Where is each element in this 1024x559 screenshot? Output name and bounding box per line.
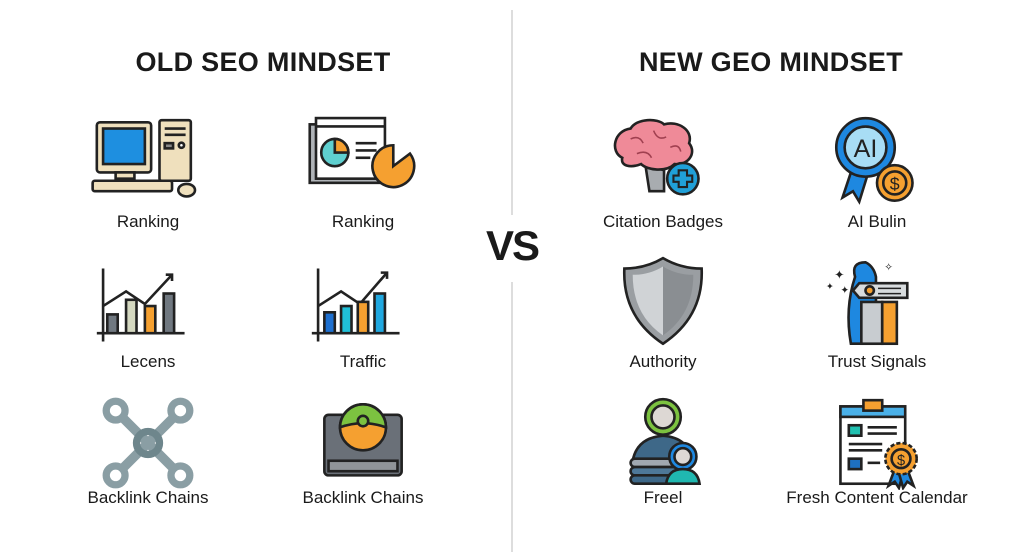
- icon: calendar: $: [897, 453, 905, 469]
- icon: AI badge: AI: [854, 135, 877, 163]
- icon: brain: [614, 118, 700, 196]
- icon: trust signals: [826, 261, 909, 346]
- vs: VS: [486, 222, 538, 269]
- icon: trust signals: ✦: [840, 286, 849, 297]
- icon: trust signals: ✧: [884, 263, 893, 274]
- icon: calendar: [839, 398, 918, 490]
- divider: [511, 10, 513, 215]
- icon: report pie: [308, 116, 416, 188]
- label: Lecens: [121, 352, 175, 371]
- label: Fresh Content Calendar: [786, 488, 968, 507]
- label: Traffic: [340, 352, 386, 371]
- icon: trust signals: ✦: [834, 268, 845, 282]
- title: new geo: NEW GEO MINDSET: [639, 47, 903, 77]
- icon: chain: [102, 398, 194, 488]
- title: old seo: OLD SEO MINDSET: [135, 47, 390, 77]
- label: Citation Badges: [603, 212, 723, 231]
- icon: computer: [91, 118, 196, 198]
- label: Freel: [644, 488, 682, 507]
- icon: shield: [622, 256, 704, 346]
- label: Ranking: [332, 212, 394, 231]
- icon: bar chart blue: [312, 268, 400, 342]
- label: Trust Signals: [828, 352, 926, 371]
- icon: bar chart grey: [96, 268, 185, 342]
- icon: trust signals: ✦: [826, 280, 834, 291]
- label: Backlink Chains: [303, 488, 423, 507]
- icon: dashboard: [323, 403, 403, 477]
- icon: AI badge: $: [890, 174, 900, 194]
- label: Backlink Chains: [88, 488, 208, 507]
- label: AI Bulin: [848, 212, 906, 231]
- icon: AI badge: [834, 116, 914, 205]
- icon: people: [629, 398, 701, 485]
- label: Authority: [629, 352, 697, 371]
- label: Ranking: [117, 212, 179, 231]
